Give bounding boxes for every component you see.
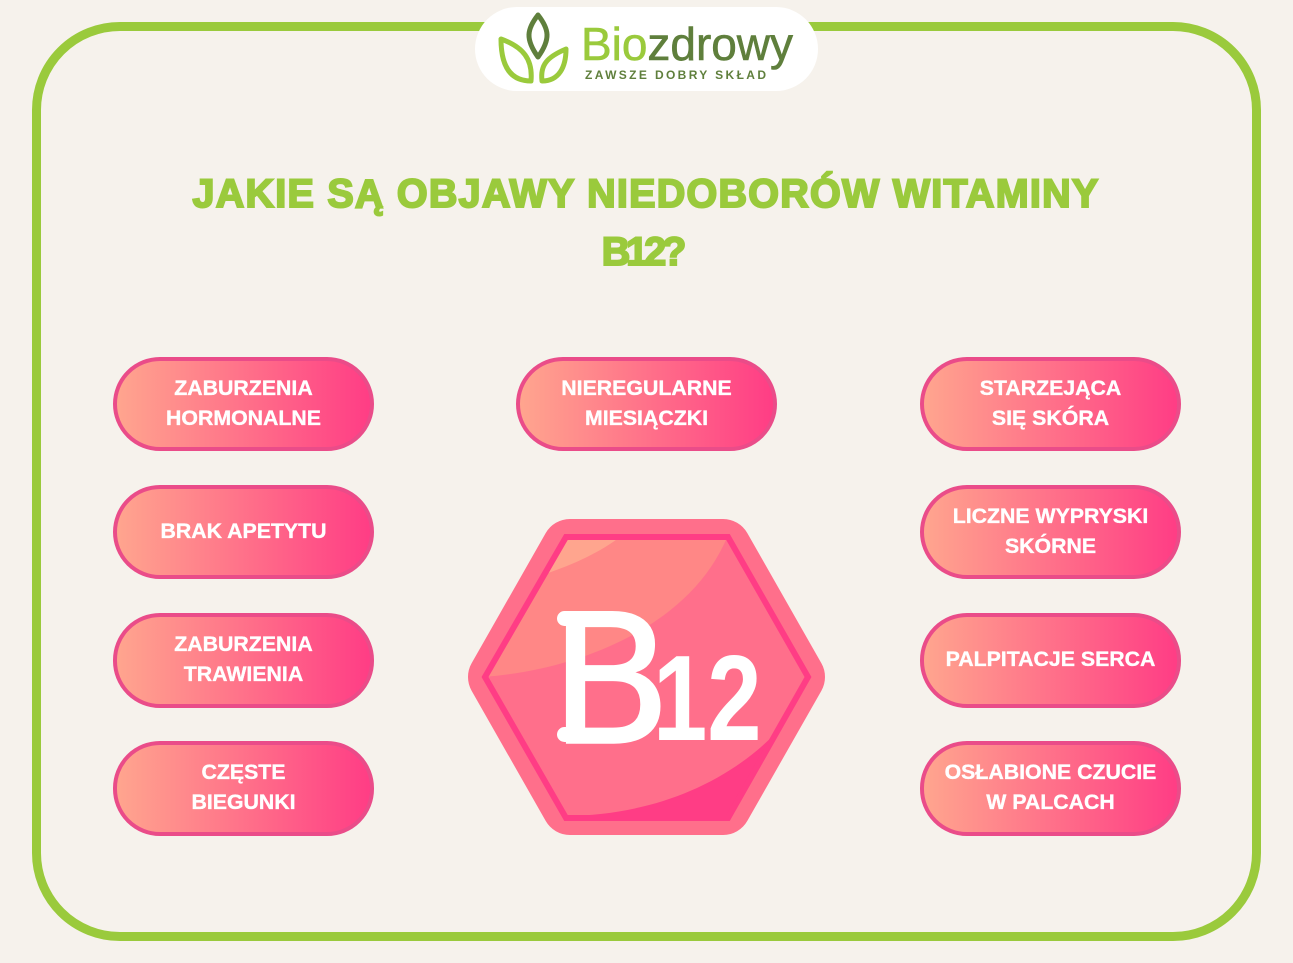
- B12 label: B: [549, 577, 672, 786]
- pill: nieregularne miesiączki: MIESIĄCZKI: [585, 406, 708, 430]
- pill: zaburzenia trawienia: ZABURZENIA: [174, 632, 313, 656]
- B12 label: [549, 577, 762, 786]
- pill: starzejąca się skóra: SIĘ SKÓRA: [992, 406, 1109, 430]
- pill: liczne wypryski skórne: SKÓRNE: [1005, 534, 1096, 558]
- pill: zaburzenia hormonalne: HORMONALNE: [166, 406, 321, 430]
- title: B12?: [602, 230, 682, 274]
- pill: zaburzenia trawienia: [113, 613, 374, 708]
- wordmark: Biozdrowy: [581, 18, 793, 70]
- logo: Biozdrowy: [475, 7, 818, 91]
- icon: B12 hexagon: [468, 519, 825, 835]
- title: JAKIE SĄ OBJAWY NIEDOBORÓW WITAMINY: [193, 172, 1099, 216]
- pill: palpitacje serca: PALPITACJE SERCA: [946, 647, 1155, 671]
- pill: zaburzenia hormonalne: [113, 357, 374, 451]
- pill: zaburzenia hormonalne: ZABURZENIA: [174, 376, 313, 400]
- pill: brak apetytu: BRAK APETYTU: [160, 518, 327, 542]
- pill: częste biegunki: BIEGUNKI: [191, 790, 296, 814]
- pill: starzejąca się skóra: STARZEJĄCA: [980, 376, 1121, 400]
- icon: leaves: [501, 15, 566, 81]
- pill: osłabione czucie w palcach: OSŁABIONE CZUCIE: [945, 760, 1156, 784]
- tagline: ZAWSZE DOBRY SKŁAD: [585, 68, 766, 82]
- hexagon inner outline: [485, 537, 808, 818]
- pill: osłabione czucie w palcach: [920, 741, 1181, 836]
- hexagon inner shading: [489, 540, 769, 815]
- pill: palpitacje serca: [920, 613, 1181, 708]
- hexagon outer: [496, 547, 797, 807]
- pill: starzejąca się skóra: [920, 357, 1181, 451]
- pill: częste biegunki: [113, 741, 374, 836]
- pill: brak apetytu: [113, 485, 374, 579]
- B12 label: 12: [653, 631, 762, 767]
- pill: liczne wypryski skórne: [920, 485, 1181, 579]
- title: [192, 170, 1100, 274]
- pill: liczne wypryski skórne: LICZNE WYPRYSKI: [953, 504, 1148, 528]
- pill: nieregularne miesiączki: NIEREGULARNE: [561, 376, 732, 400]
- pill: zaburzenia trawienia: TRAWIENIA: [184, 662, 303, 686]
- pill: osłabione czucie w palcach: W PALCACH: [986, 790, 1115, 814]
- pill: częste biegunki: CZĘSTE: [201, 760, 286, 784]
- pill: nieregularne miesiączki: [516, 357, 777, 451]
